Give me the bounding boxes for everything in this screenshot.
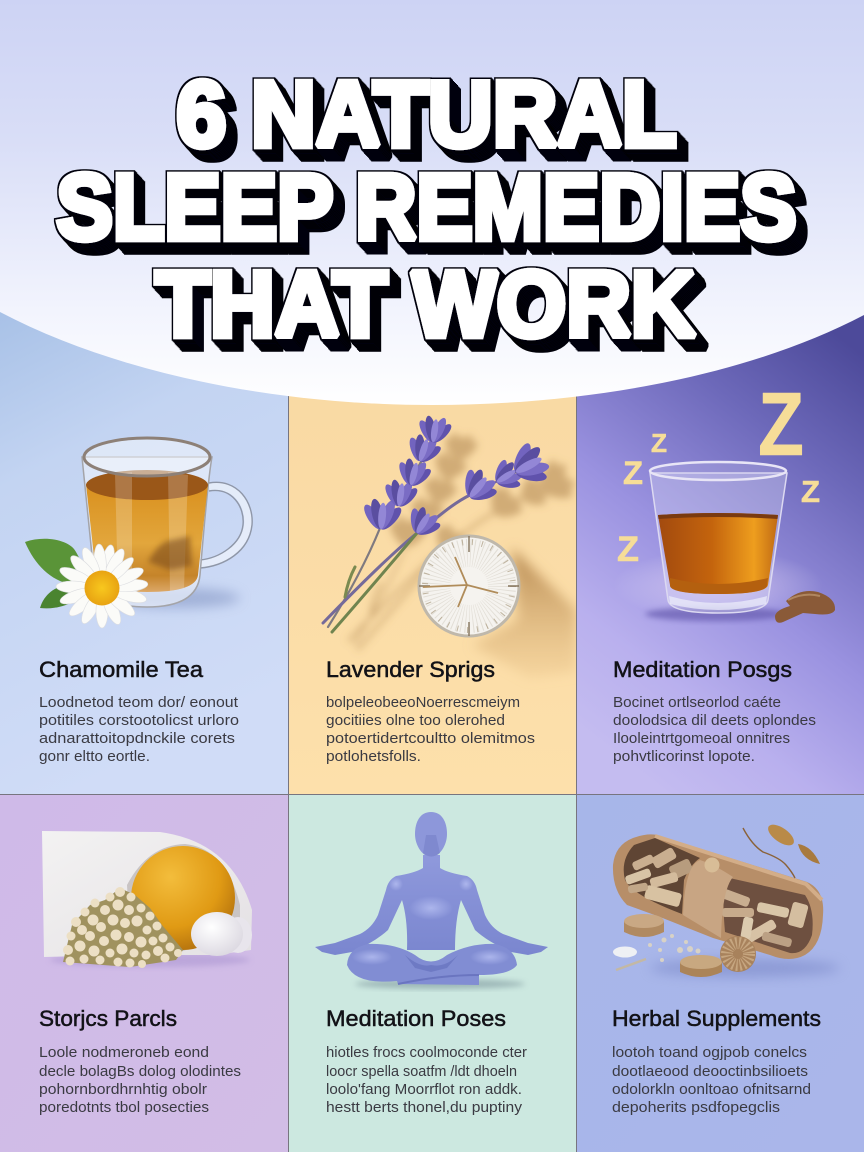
text block: meditation poses: loolo'fang Moorrflot ron addk. [326, 1082, 522, 1098]
icon: tea mug with chamomile [25, 438, 252, 628]
text block: lavender sprigs: bolpeleobeeoNoerrescmeiym [326, 695, 520, 711]
title: 6 NATURAL [176, 62, 676, 166]
icon: white ball [191, 912, 252, 956]
text block: meditation poses: hestt berts thonel,du puptiny [326, 1100, 523, 1116]
text block: herbal supplements: depoherits psdfopegclis [612, 1100, 780, 1116]
panel: meditation posgs [577, 300, 864, 794]
text block: chamomile tea: Loodnetod teom dor/ eonout [39, 695, 238, 711]
heading: meditation poses: Meditation Poses [326, 1006, 506, 1031]
icon: herb tube with supplements [613, 821, 840, 977]
icon: floating z letters: Z [651, 428, 667, 458]
heading: chamomile tea: Chamomile Tea [39, 657, 204, 682]
text block: lavender sprigs: potoertidertcoultto olemitmos [326, 731, 535, 747]
text block: meditation posgs: pohvtlicorinst lopote. [613, 749, 755, 765]
title: THAT WORK [156, 252, 696, 356]
crumbs and pill [613, 934, 700, 970]
icon: brown nut [775, 591, 835, 623]
text block: meditation poses: loocr spella soatfm /ldt dhoeln [326, 1064, 517, 1080]
panel: chamomile tea [0, 300, 288, 794]
icon: floating z letters: Z [623, 455, 643, 491]
text block: lavender sprigs [326, 695, 535, 765]
text block: storjcs parcls: pohornbordhrnhtig obolr [39, 1082, 207, 1098]
icon: chamomile flower [56, 544, 148, 628]
icon: dried flower cluster [63, 887, 183, 968]
text block: meditation posgs: Ilooleintrtgomeoal onnitres [613, 731, 790, 747]
text block: chamomile tea: adnarattoitopdnckile corets [39, 731, 235, 747]
text block: meditation posgs [613, 695, 816, 765]
text block: storjcs parcls: poredotnts tbol posecties [39, 1100, 209, 1116]
panel: meditation poses [289, 795, 576, 1152]
icon: floating z letters: Z [801, 474, 820, 509]
text block: storjcs parcls: decle bolagBs dolog olodintes [39, 1064, 241, 1080]
panel: storjcs parcls [0, 795, 288, 1152]
text block: storjcs parcls: Loole nodmeroneb eond [39, 1045, 209, 1061]
heading: herbal supplements: Herbal Supplements [612, 1006, 821, 1031]
icon: lavender sprigs [323, 413, 557, 632]
icon: floating z letters: Z [758, 375, 804, 475]
text block: chamomile tea: potitiles corstootolicst urloro [39, 713, 239, 729]
icon: floating z letters [617, 375, 820, 569]
text block: herbal supplements [612, 1045, 811, 1116]
heading: meditation posgs: Meditation Posgs [613, 657, 792, 682]
text block: chamomile tea [39, 695, 239, 765]
herb chunks [624, 847, 809, 948]
text block: meditation posgs: Bocinet ortlseorlod caéte [613, 695, 781, 711]
heading: storjcs parcls: Storjcs Parcls [39, 1006, 177, 1031]
icon: round dial [419, 536, 519, 636]
text block: meditation posgs: doolodsica dil deets oplondes [613, 713, 816, 729]
text block: herbal supplements: odolorkln oonltoao ofnitsarnd [612, 1082, 811, 1098]
title: SLEEP REMEDIES [56, 155, 796, 259]
title [56, 62, 796, 356]
icon: amber glass [645, 462, 787, 621]
icon: floating z letters: Z [617, 530, 639, 569]
panel: herbal supplements [577, 795, 864, 1152]
header: curved background [0, 0, 864, 405]
icon: round tablets [624, 914, 756, 977]
icon: golden orb [131, 846, 235, 950]
text block: meditation poses [326, 1045, 527, 1116]
text block: meditation poses: hiotles frocs coolmoconde cter [326, 1045, 527, 1061]
text block: lavender sprigs: gocitiies olne too olerohed [326, 713, 505, 729]
text block: chamomile tea: gonr eltto eortle. [39, 749, 150, 765]
panel: lavender sprigs [289, 396, 576, 794]
heading: lavender sprigs: Lavender Sprigs [326, 657, 495, 682]
text block: storjcs parcls [39, 1045, 241, 1116]
icon: meditating figure [315, 812, 548, 989]
text block: herbal supplements: dootlaeood deooctinbsilioets [612, 1064, 808, 1080]
text block: herbal supplements: lootoh toand ogjpob conelcs [612, 1045, 807, 1061]
icon: sprig and leaves [743, 821, 820, 878]
icon: white sachet [42, 831, 252, 957]
icon: green leaves [25, 539, 90, 608]
text block: lavender sprigs: potlohetsfolls. [326, 749, 421, 765]
